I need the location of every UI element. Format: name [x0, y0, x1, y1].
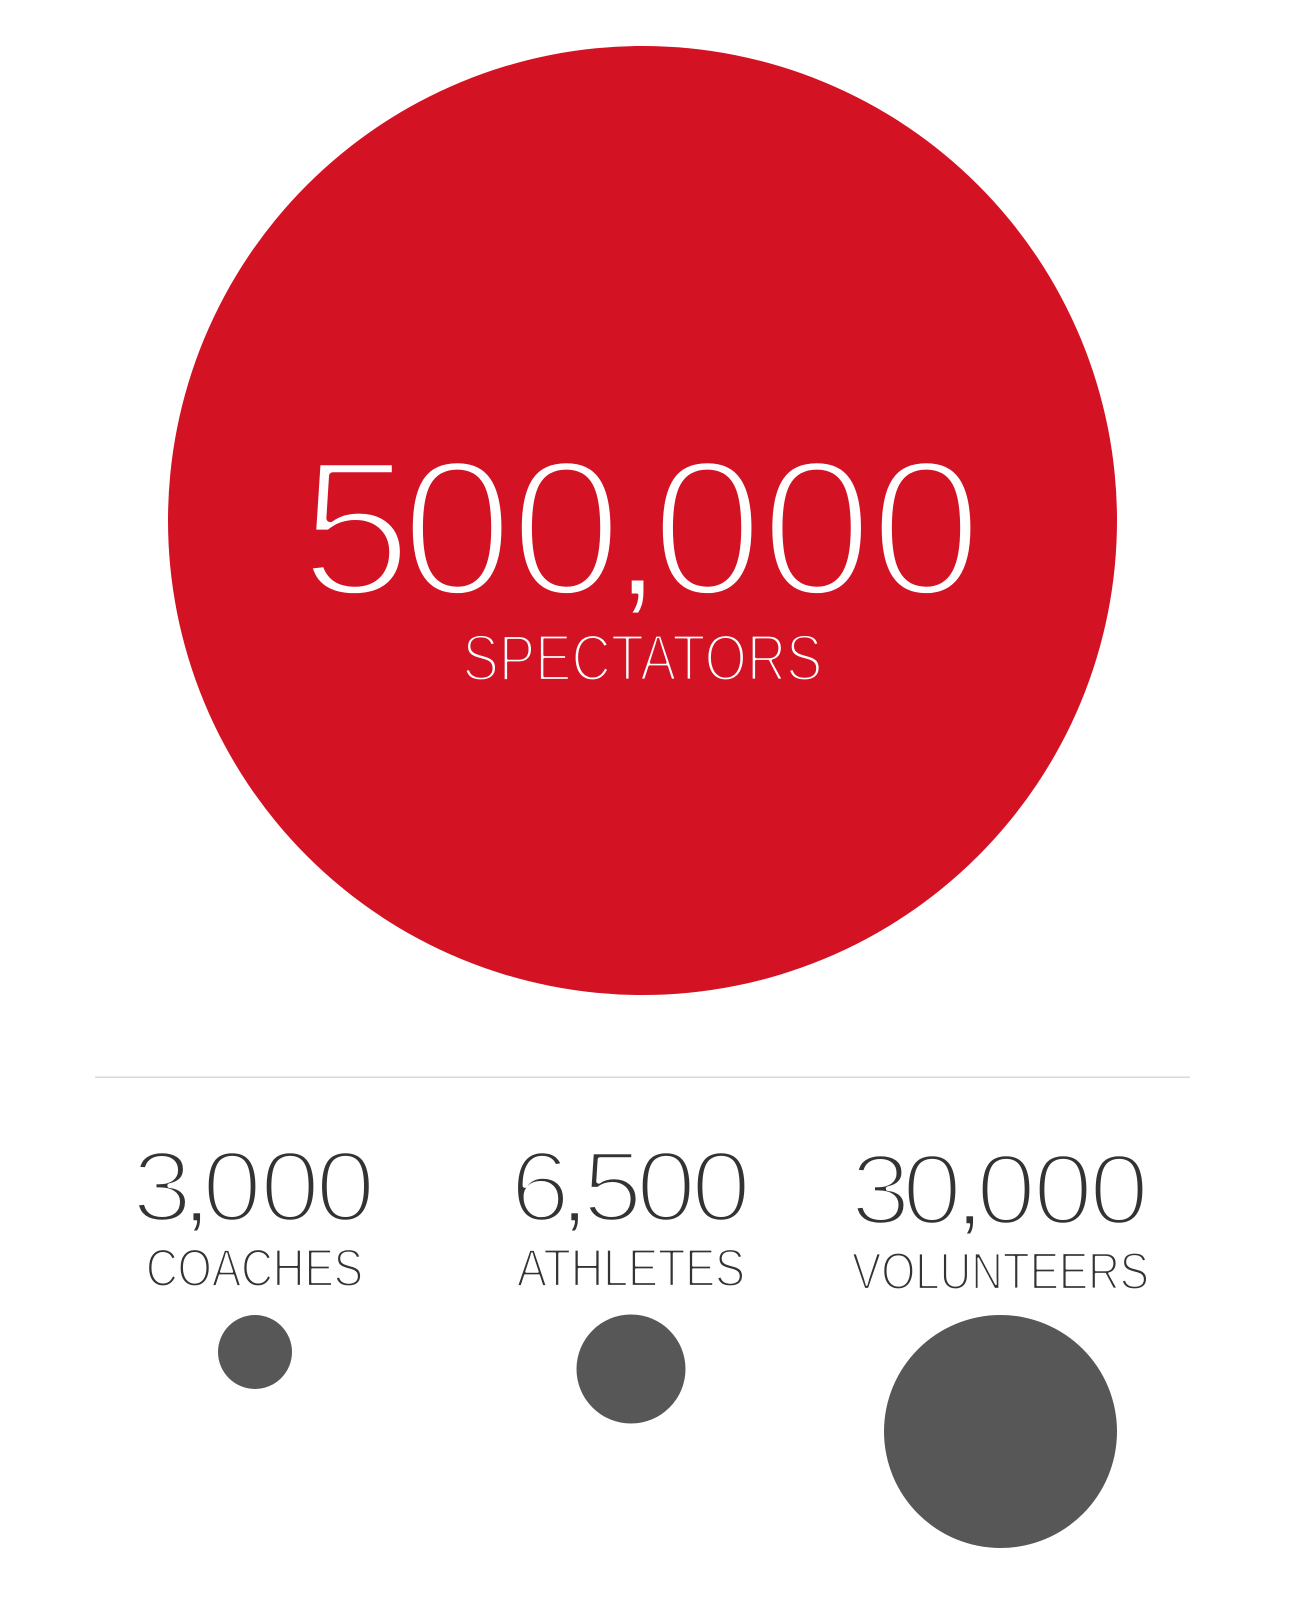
- volunteers circle: [884, 1315, 1117, 1548]
- big red circle: [168, 46, 1117, 995]
- coaches number: 3: [132, 1132, 192, 1243]
- spectators number: 000: [651, 420, 982, 636]
- athletes circle: [576, 1314, 686, 1424]
- divider line: [95, 1076, 1190, 1078]
- spectators number: ,: [616, 460, 659, 627]
- volunteers number: 000: [976, 1135, 1149, 1246]
- spectators label: SPECTATORS: [462, 620, 822, 694]
- coaches label: COACHES: [146, 1239, 363, 1298]
- volunteers number: ,: [958, 1152, 982, 1241]
- athletes number: 6: [510, 1132, 570, 1243]
- panel: coaches: [132, 1132, 375, 1389]
- volunteers label: VOLUNTEERS: [852, 1242, 1149, 1300]
- panel: athletes: [510, 1132, 751, 1424]
- coaches circle: [218, 1315, 292, 1389]
- volunteers number: 30: [851, 1135, 962, 1246]
- spectators number: 500: [300, 420, 622, 636]
- panel: spectators: [168, 46, 1117, 995]
- athletes label: ATHLETES: [517, 1239, 745, 1298]
- panel: volunteers: [851, 1135, 1149, 1548]
- athletes number: ,: [563, 1149, 587, 1238]
- coaches number: 000: [202, 1132, 375, 1243]
- coaches number: ,: [185, 1149, 209, 1238]
- athletes number: 500: [583, 1132, 751, 1243]
